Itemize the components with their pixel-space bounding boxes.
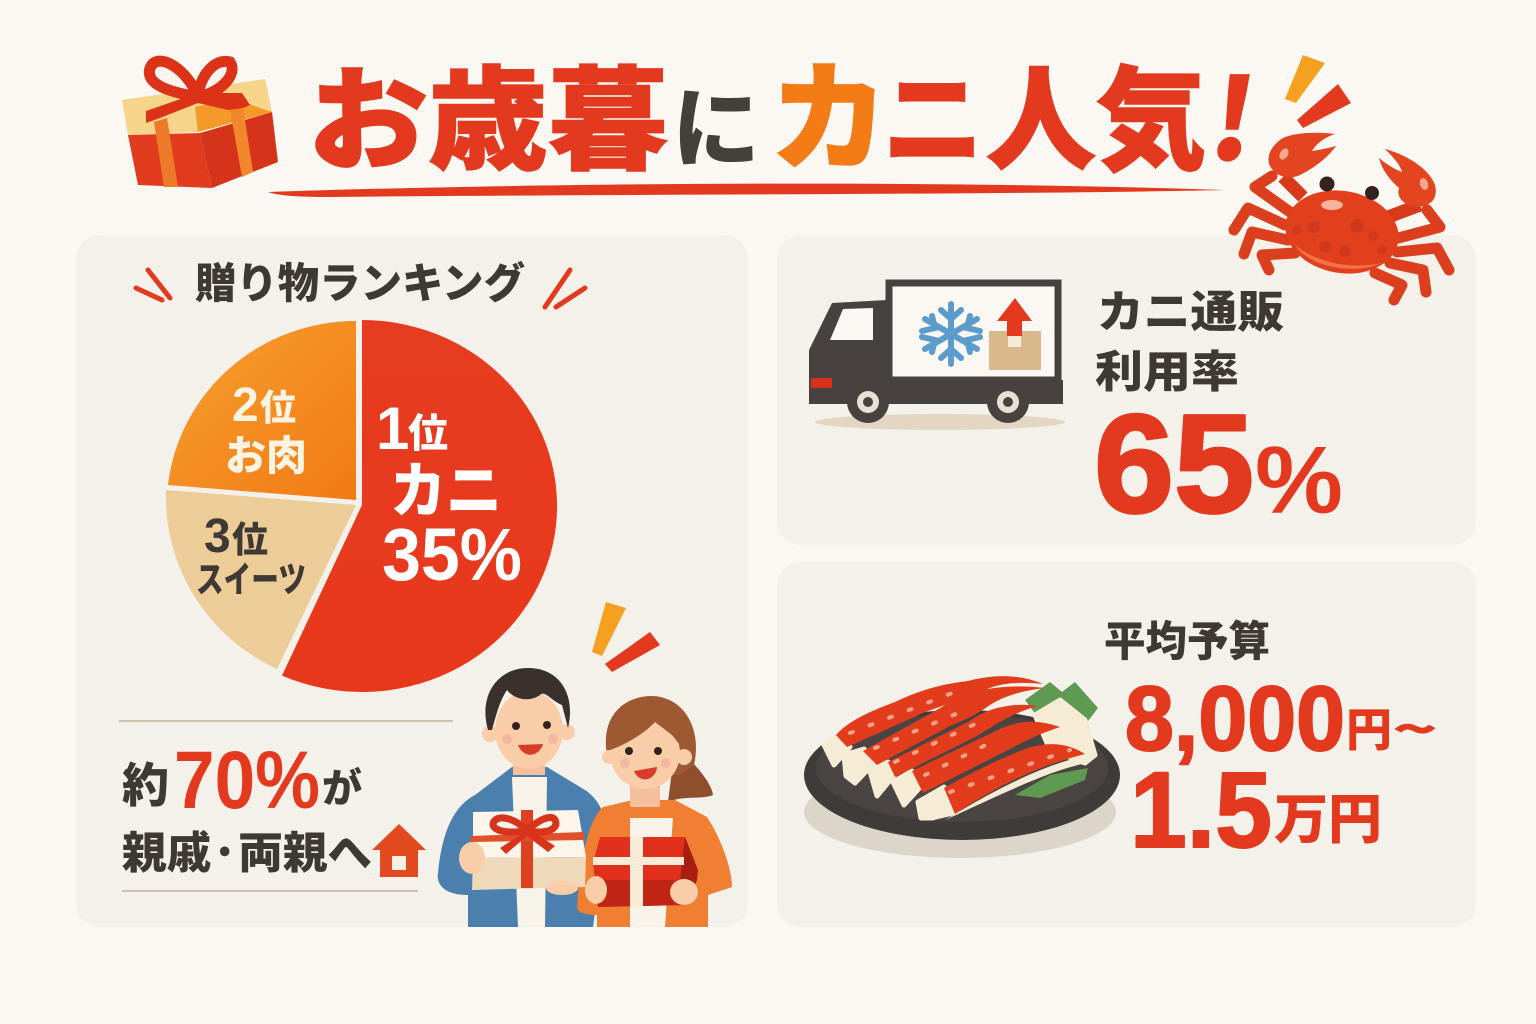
left claw <box>1269 133 1336 177</box>
text block: mail-order usage rate: カニ通販 <box>1097 276 1284 340</box>
text block: 70% to relatives and parents <box>119 721 453 891</box>
pie label: rank 1: 1 <box>376 395 409 462</box>
title <box>308 23 1268 194</box>
title: お歳暮 <box>308 31 668 193</box>
pie label: rank 1 <box>376 395 522 596</box>
pie label: rank 2: お肉 <box>225 422 307 482</box>
burst marks above couple <box>592 602 660 672</box>
icon: snowflake <box>922 304 980 364</box>
icon: house <box>372 824 426 877</box>
text block: average budget: 万円 <box>1274 775 1382 854</box>
panel: mail-order usage <box>777 235 1476 545</box>
text block: average budget: 円 <box>1346 694 1392 760</box>
leg highlights <box>850 690 1070 792</box>
illustration: crab legs on plate <box>804 676 1120 858</box>
pie label: rank 2: 2 <box>232 379 259 432</box>
man's gift <box>471 810 586 890</box>
icon: crab <box>1234 133 1449 300</box>
heading: gift ranking: 贈り物ランキング <box>195 250 525 311</box>
text block: mail-order usage rate: 利用率 <box>1095 336 1239 400</box>
text block: average budget: 8,000 <box>1125 668 1345 770</box>
pie label: rank 2 <box>225 379 307 482</box>
garnish leaves <box>1025 682 1098 725</box>
text block: 70% to relatives and parents: 70% <box>174 735 320 826</box>
pie label: rank 2: 位 <box>260 379 296 431</box>
text block: average budget: 平均予算 <box>1104 608 1270 669</box>
illustration: refrigerated delivery truck <box>809 283 1065 430</box>
right claw <box>1379 149 1436 207</box>
text block: 70% to relatives and parents: が <box>322 756 362 814</box>
title burst marks <box>1285 55 1351 128</box>
text block: average budget: 1.5 <box>1130 749 1272 870</box>
crab legs <box>836 676 1085 814</box>
man <box>438 668 606 927</box>
pie label: rank 3: スイーツ <box>196 551 306 603</box>
pie label: rank 1: 位 <box>408 401 448 459</box>
crab meat <box>824 700 1095 818</box>
text block: mail-order usage rate: 65 <box>1094 385 1254 542</box>
icon: parcel with up arrow <box>989 298 1041 370</box>
pie label: rank 3: 位 <box>232 511 268 563</box>
text block: average budget <box>1104 608 1438 870</box>
title underline brush stroke <box>268 184 1225 197</box>
panel: average budget <box>777 562 1476 927</box>
icon: gift box <box>122 61 278 188</box>
pie label: rank 3 <box>196 510 306 603</box>
claw highlights <box>1278 147 1430 191</box>
text block: average budget: ~ <box>1392 694 1438 760</box>
woman's gift <box>593 837 698 907</box>
pie label: rank 3: 3 <box>204 510 231 563</box>
text block: mail-order usage rate <box>1094 276 1343 542</box>
title: ニ <box>882 31 984 193</box>
text block: 70% to relatives and parents: 約 <box>122 747 169 816</box>
text block: mail-order usage rate: % <box>1255 427 1343 534</box>
woman <box>577 696 732 927</box>
text block: 70% to relatives and parents: 親戚·両親へ <box>122 817 372 881</box>
title: カ <box>770 23 888 194</box>
pie chart: gift ranking <box>166 320 557 692</box>
title: ! <box>1201 31 1268 193</box>
title: に <box>672 59 760 186</box>
hands <box>459 842 698 905</box>
pie label: rank 1: 35% <box>382 513 522 596</box>
panel: gift ranking <box>76 235 748 927</box>
title: 人気 <box>986 31 1206 193</box>
pie label: rank 1: カニ <box>390 443 502 530</box>
illustration: couple with gifts <box>438 668 732 927</box>
